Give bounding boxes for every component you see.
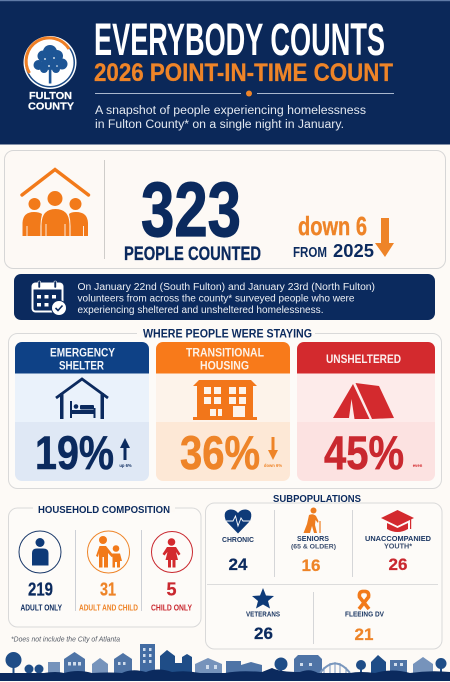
item: chronic: 24 [229, 555, 248, 574]
description [95, 105, 366, 131]
divider with dot [95, 90, 394, 96]
change: down 6 from 2025: 2025 [333, 240, 374, 261]
text: survey description: experiencing sheltered and unsheltered homelessness. [78, 305, 324, 316]
item: unaccompanied youth [365, 510, 431, 574]
trend: down 6%: down 6% [264, 463, 282, 468]
logo: Fulton County: COUNTY [28, 102, 74, 112]
card: emergency shelter: EMERGENCY [50, 348, 115, 360]
heading: WHERE PEOPLE WERE STAYING [143, 328, 312, 340]
item: unaccompanied youth: UNACCOMPANIED [365, 536, 431, 543]
skyline [0, 644, 450, 681]
item: chronic [222, 509, 254, 574]
item: adult and child: 31 [100, 580, 116, 600]
heading: HOUSEHOLD COMPOSITION [38, 504, 170, 516]
card: unsheltered: UNSHELTERED [326, 354, 401, 366]
icon: calendar [32, 281, 66, 316]
icon: tent [333, 383, 394, 419]
card: unsheltered [297, 342, 435, 481]
item: child only [151, 532, 192, 612]
icon: house with people [22, 170, 88, 236]
text: survey description: volunteers from across the county* surveyed people who were [78, 294, 355, 304]
panel: household composition [8, 504, 201, 627]
item: veterans: VETERANS [246, 612, 280, 618]
item: unaccompanied youth: 26 [389, 555, 407, 574]
item: child only: CHILD ONLY [151, 602, 192, 612]
item: adult and child: ADULT AND CHILD [79, 602, 138, 612]
item: adult and child [79, 531, 138, 612]
card: transitional housing [156, 342, 290, 481]
icon: apartment building [193, 380, 257, 420]
card: transitional housing: TRANSITIONAL [186, 348, 264, 360]
header banner [0, 0, 450, 144]
heading: SUBPOPULATIONS [273, 493, 361, 505]
item: seniors: SENIORS [297, 536, 329, 543]
card: emergency shelter: SHELTER [59, 360, 105, 372]
change: down 6 from 2025: FROM [293, 245, 327, 261]
card: emergency shelter [15, 342, 149, 481]
item: fleeing DV [345, 591, 384, 644]
footnote: *Does not include the City of Atlanta [11, 636, 120, 644]
trend: up 6%: up 6% [119, 463, 132, 468]
item: adult only [19, 531, 62, 612]
icon: house with bed [56, 379, 108, 419]
item: unaccompanied youth: YOUTH* [384, 544, 412, 550]
panel: where people were staying [8, 328, 442, 488]
item: veterans: 26 [254, 624, 273, 643]
subtitle: 2026 POINT-IN-TIME COUNT [94, 59, 393, 87]
item: adult only: ADULT ONLY [20, 602, 62, 612]
trend: even: even [413, 463, 423, 468]
panel: people counted [4, 150, 446, 268]
panel: subpopulations [206, 493, 442, 649]
item: adult only: 219 [28, 580, 53, 600]
value: 36%: 36% [180, 426, 260, 479]
change: down 6 from 2025: down 6 [298, 211, 367, 241]
item: fleeing DV: 21 [355, 625, 373, 644]
item: chronic: CHRONIC [222, 537, 254, 544]
item: seniors: (65 & OLDER) [291, 544, 336, 550]
item: seniors [291, 508, 336, 575]
item: child only: 5 [166, 580, 177, 600]
description: A snapshot of people experiencing homelessness [95, 105, 366, 117]
text: survey description [78, 282, 375, 316]
card: transitional housing: HOUSING [200, 360, 249, 372]
label: people counted: PEOPLE COUNTED [124, 243, 261, 265]
description: in Fulton County* on a single night in January. [95, 119, 344, 131]
logo: Fulton County: FULTON [29, 91, 72, 102]
value: 45%: 45% [324, 426, 404, 479]
callout: survey dates [14, 274, 435, 320]
logo: Fulton County [24, 36, 76, 112]
total: 323: 323 [141, 167, 241, 253]
value: 19%: 19% [35, 426, 114, 479]
item: veterans [246, 588, 280, 643]
item: seniors: 16 [302, 556, 320, 575]
change: down 6 from 2025 [293, 211, 394, 261]
text: survey description: On January 22nd (South Fulton) and January 23rd (North Fulton) [78, 282, 375, 293]
item: fleeing DV: FLEEING DV [345, 612, 384, 618]
